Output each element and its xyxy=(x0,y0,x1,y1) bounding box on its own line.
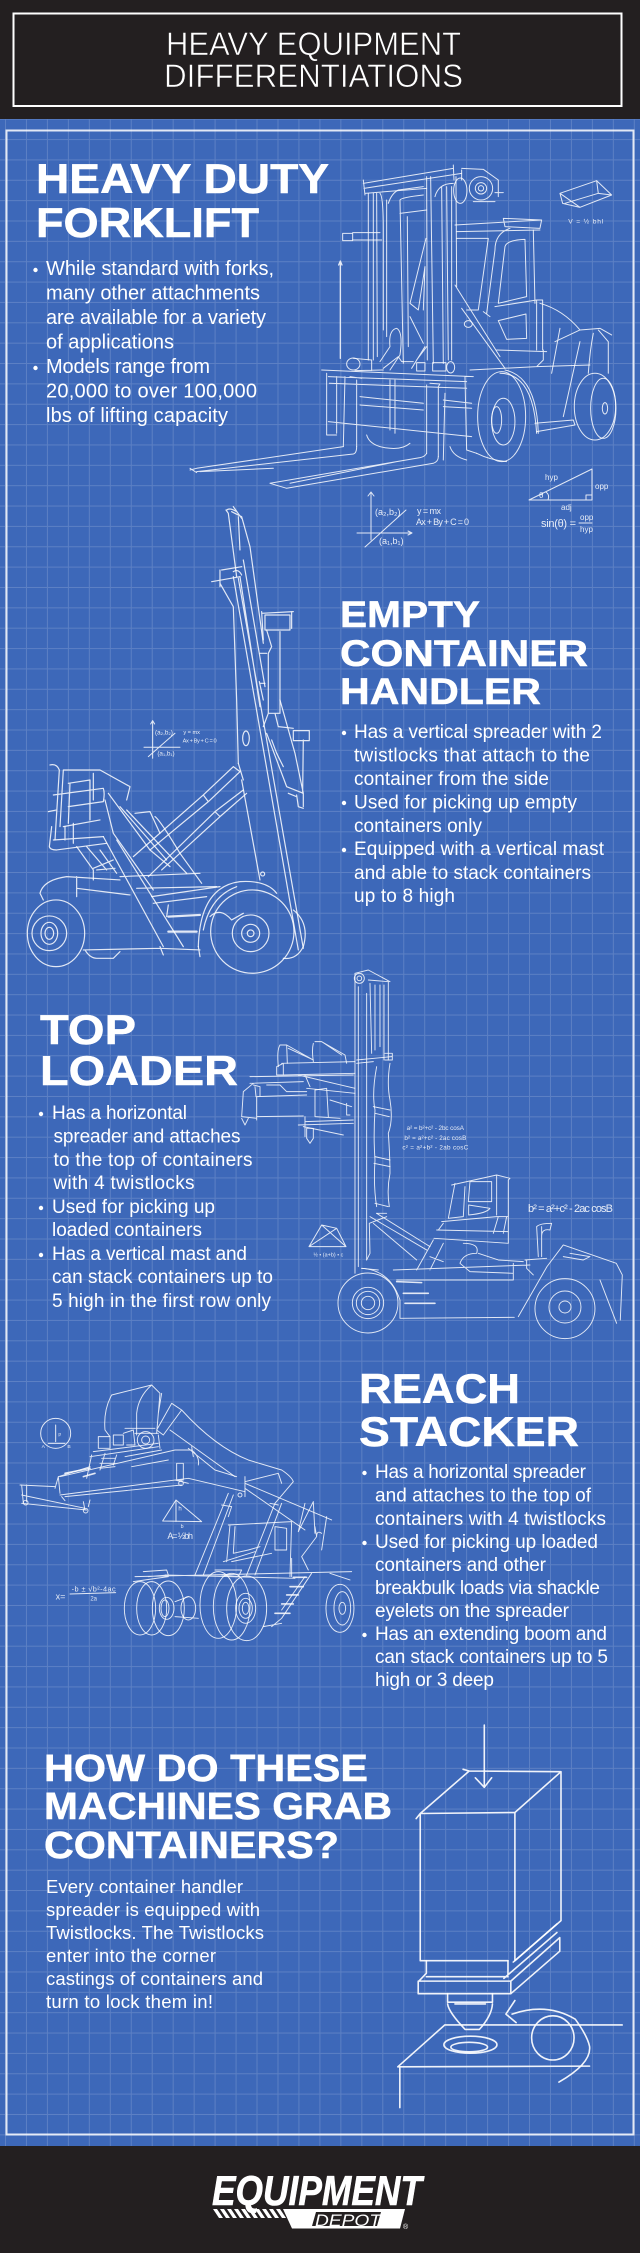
logo: equipment depot: ® xyxy=(403,2223,409,2231)
text block: top loader bullets: can stack containers up to xyxy=(52,1267,273,1288)
formula: triangle area: b xyxy=(181,1524,184,1530)
formula: sine triangle xyxy=(529,469,609,534)
drawing: reach stacker xyxy=(20,1385,354,1641)
formula: prism volume xyxy=(560,181,612,225)
text block: top loader bullets: 5 high in the first row only xyxy=(52,1291,272,1312)
text block: empty container handler bullets: container from the side xyxy=(354,769,549,790)
text block: reach stacker bullets: eyelets on the spreader xyxy=(375,1601,570,1622)
text block: top loader bullets: Has a vertical mast and xyxy=(52,1244,247,1265)
text block: top loader bullets: spreader and attaches xyxy=(54,1126,240,1148)
formula: small line graph: Ax + By + C = 0 xyxy=(183,739,217,745)
text block: top loader bullets: Has a horizontal xyxy=(52,1103,187,1124)
heading: top loader: LOADER xyxy=(40,1047,238,1094)
formula: law of cosines: c² = a²+b² - 2ab cosC xyxy=(402,1145,469,1152)
heading: how do these machines grab containers: MACHINES GRAB xyxy=(44,1786,392,1828)
title banner xyxy=(0,0,640,119)
formula: circle chord xyxy=(41,1418,71,1450)
text block: reach stacker bullets xyxy=(362,1462,608,1691)
text block: twistlock explanation: Twistlocks. The Twistlocks xyxy=(46,1922,264,1943)
text block: top loader bullets: with 4 twistlocks xyxy=(52,1173,194,1194)
title banner: DIFFERENTIATIONS xyxy=(164,58,463,94)
formula: trapezoid area xyxy=(309,1225,346,1259)
formula: line graph: (a₂,b₂) xyxy=(375,507,400,517)
heading: how do these machines grab containers: CONTAINERS? xyxy=(44,1825,339,1867)
text block: forklift bullets: While standard with forks, xyxy=(46,258,274,280)
heading: heavy duty forklift: FORKLIFT xyxy=(36,199,259,246)
heading: how do these machines grab containers xyxy=(44,1748,392,1867)
text block: empty container handler bullets: twistlocks that attach to the xyxy=(354,746,590,766)
formula: sine triangle: adj xyxy=(561,503,572,512)
text block: forklift bullets: are available for a variety xyxy=(46,307,266,329)
heading: top loader: TOP xyxy=(40,1006,136,1053)
text block: twistlock explanation: enter into the corner xyxy=(46,1945,216,1966)
text block: empty container handler bullets: Has a vertical spreader with 2 xyxy=(354,722,602,743)
formula: b squared: b² = a²+c² - 2ac cosB xyxy=(528,1203,613,1215)
formula: quadratic: -b ± √b²-4ac xyxy=(72,1584,116,1593)
text block: forklift bullets: many other attachments xyxy=(46,282,260,304)
formula: sine triangle: hyp xyxy=(545,473,558,482)
formula: sine triangle: θ xyxy=(539,491,544,500)
formula: circle chord: p xyxy=(58,1432,61,1438)
formula: law of cosines: b² = a²+c² - 2ac cosB xyxy=(404,1135,466,1142)
text block: twistlock explanation: turn to lock them in! xyxy=(46,1991,213,2012)
heading: empty container handler: HANDLER xyxy=(340,670,541,712)
formula: triangle area: A= ½bh xyxy=(167,1531,193,1541)
heading: heavy duty forklift: HEAVY DUTY xyxy=(36,155,329,202)
text block: empty container handler bullets: Equipped with a vertical mast xyxy=(354,839,605,860)
text block: reach stacker bullets: Has an extending boom and xyxy=(375,1624,607,1645)
text block: forklift bullets: 20,000 to over 100,000 xyxy=(46,380,257,402)
formula: line graph xyxy=(357,492,469,547)
heading: how do these machines grab containers: HOW DO THESE xyxy=(44,1748,368,1790)
logo: equipment depot: EQUIPMENT xyxy=(212,2167,425,2215)
formula: law of cosines: a² = b²+c² - 2bc cosA xyxy=(407,1125,465,1132)
formula: line graph: (a₁,b₁) xyxy=(379,536,404,546)
text block: twistlock explanation: spreader is equipped with xyxy=(46,1899,260,1920)
formula: small line graph: y = mx xyxy=(183,730,200,736)
text block: forklift bullets xyxy=(33,258,274,427)
formula: sine triangle: opp xyxy=(580,513,594,522)
title banner: HEAVY EQUIPMENT xyxy=(166,26,461,62)
heading: heavy duty forklift xyxy=(36,155,329,246)
drawing: twistlock entering corner casting xyxy=(398,1725,622,2108)
formula: line graph: y = mx xyxy=(417,506,442,516)
formula: quadratic: x= xyxy=(56,1591,65,1601)
text block: twistlock explanation: Every container handler xyxy=(46,1876,243,1897)
heading: empty container handler: EMPTY xyxy=(340,593,480,635)
text block: top loader bullets: to the top of containers xyxy=(54,1150,252,1171)
text block: top loader bullets xyxy=(39,1103,273,1312)
text block: forklift bullets: lbs of lifting capacity xyxy=(46,405,228,427)
text block: empty container handler bullets: Used for picking up empty xyxy=(354,792,578,814)
heading: top loader xyxy=(40,1006,238,1094)
text block: empty container handler bullets: and able to stack containers xyxy=(354,863,591,884)
formula: triangle area xyxy=(163,1500,202,1541)
formula: trapezoid area: ½ • (a+b) • c xyxy=(313,1252,344,1259)
logo: equipment depot: DEPOT xyxy=(315,2211,383,2230)
formula: small line graph: (a₁,b₁) xyxy=(157,751,175,758)
text block: forklift bullets: of applications xyxy=(46,332,174,354)
text block: reach stacker bullets: Used for picking up loaded xyxy=(375,1532,598,1553)
formula: triangle area: h xyxy=(178,1507,182,1513)
text block: empty container handler bullets: containers only xyxy=(354,816,482,837)
text block: reach stacker bullets: breakbulk loads via shackle xyxy=(375,1578,600,1599)
drawing: top loader xyxy=(242,970,622,1339)
formula: circle chord: A xyxy=(42,1444,46,1450)
heading: empty container handler xyxy=(340,593,588,712)
text block: empty container handler bullets xyxy=(342,722,605,907)
text block: top loader bullets: Used for picking up xyxy=(52,1197,215,1218)
text block: reach stacker bullets: containers and other xyxy=(375,1555,547,1576)
formula: prism volume: V = ½ bhl xyxy=(568,217,604,225)
drawing: empty container handler xyxy=(27,507,309,973)
formula: quadratic: 2a xyxy=(90,1597,98,1603)
formula: circle chord: B xyxy=(67,1444,71,1450)
formula: small line graph xyxy=(144,721,217,758)
drawing: heavy duty forklift xyxy=(190,165,616,488)
heading: reach stacker xyxy=(359,1365,579,1455)
formula: sine triangle: opp xyxy=(595,482,609,491)
heading: reach stacker: REACH xyxy=(359,1365,520,1412)
text block: reach stacker bullets: can stack containers up to 5 xyxy=(375,1647,608,1668)
text block: forklift bullets: Models range from xyxy=(46,356,210,378)
text block: reach stacker bullets: Has a horizontal spreader xyxy=(375,1462,587,1483)
formula: sine triangle: hyp xyxy=(580,525,593,534)
footer bar with logo xyxy=(0,2146,640,2253)
heading: reach stacker: STACKER xyxy=(359,1408,579,1455)
heading: empty container handler: CONTAINER xyxy=(340,632,588,674)
text block: twistlock explanation xyxy=(46,1876,264,2012)
formula: law of cosines xyxy=(402,1125,469,1152)
formula: small line graph: (a₂,b₂) xyxy=(155,730,173,737)
formula: sine triangle: sin(θ) = xyxy=(541,518,576,530)
logo: equipment depot xyxy=(212,2167,425,2231)
text block: empty container handler bullets: up to 8 high xyxy=(354,886,455,907)
formula: line graph: Ax + By + C = 0 xyxy=(416,517,469,527)
text block: reach stacker bullets: high or 3 deep xyxy=(375,1670,494,1691)
text block: top loader bullets: loaded containers xyxy=(52,1220,202,1241)
text block: twistlock explanation: castings of containers and xyxy=(46,1968,263,1989)
text block: reach stacker bullets: containers with 4 twistlocks xyxy=(375,1509,606,1530)
formula: quadratic xyxy=(56,1584,116,1603)
text block: reach stacker bullets: and attaches to the top of xyxy=(375,1486,592,1506)
